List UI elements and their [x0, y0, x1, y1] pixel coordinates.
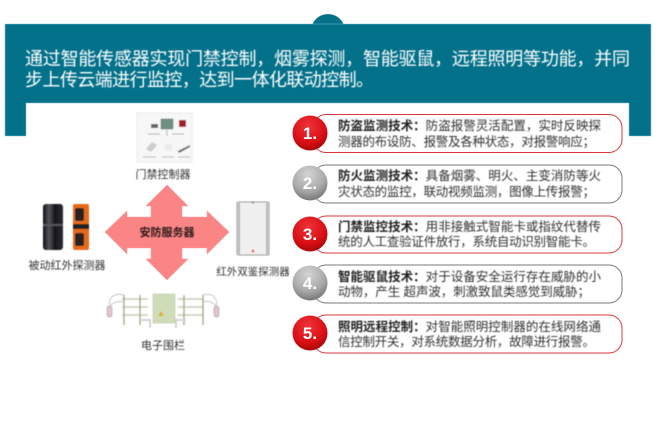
- item 5 text: [338, 319, 601, 349]
- label: electronic fence: 电子围栏: [141, 338, 185, 352]
- banner text: 步上传云端进行监控，达到一体化联动控制。: [25, 70, 374, 90]
- item 4 text: 智能驱鼠技术：对于设备安全运行存在威胁的小: [338, 269, 601, 284]
- badge 1: [292, 116, 328, 150]
- badge 1: 1.: [303, 124, 317, 143]
- item 4: [292, 265, 622, 303]
- badge 5: 5.: [303, 324, 317, 343]
- device: access controller: [137, 113, 192, 162]
- banner text: [25, 49, 630, 90]
- arrow label: 安防服务器: [140, 225, 194, 239]
- badge 2: 2.: [303, 174, 317, 193]
- item 2 text: 防火监测技术：具备烟雾、明火、主变消防等火: [338, 168, 601, 183]
- item 4 text: 动物，产生 超声波，刺激致鼠类感觉到威胁；: [338, 284, 590, 299]
- item 4 text: [338, 269, 601, 299]
- item 2: [292, 165, 622, 203]
- item 3 text: [338, 219, 601, 249]
- label: dual infrared detector: 红外双鉴探测器: [216, 265, 290, 278]
- device: passive infrared detector: [43, 204, 89, 250]
- item 1 text: 防盗监测技术：防盗报警灵活配置，实时反映探: [338, 118, 601, 133]
- item 2 text: [338, 168, 601, 199]
- four-way arrow: [105, 185, 229, 280]
- badge 3: 3.: [303, 225, 317, 244]
- label: access controller: 门禁控制器: [136, 167, 190, 181]
- item 3: [292, 216, 622, 253]
- item 5: [292, 315, 622, 353]
- banner text: 通过智能传感器实现门禁控制，烟雾探测，智能驱鼠，远程照明等功能，并同: [25, 49, 630, 69]
- item 1 text: [338, 118, 601, 149]
- label: passive infrared detector: 被动红外探测器: [28, 259, 106, 272]
- item 1 text: 测器的布设防、报警及各种状态，对报警响应；: [338, 134, 595, 149]
- item 2 text: 灾状态的监控，联动视频监测，图像上传报警；: [338, 184, 595, 199]
- item 5 text: 照明远程控制：对智能照明控制器的在线网络通: [338, 319, 601, 334]
- device: electronic fence: [107, 294, 219, 328]
- badge 4: 4.: [303, 274, 317, 293]
- item 3 text: 统的人工查验证件放行，系统自动识别智能卡。: [338, 234, 595, 249]
- badge 2: [292, 166, 328, 200]
- header banner: [5, 14, 651, 136]
- badge 5: [292, 316, 328, 350]
- badge 4: [292, 266, 328, 300]
- badge 3: [292, 216, 328, 252]
- item 1: [292, 114, 622, 152]
- device: dual infrared detector: [237, 202, 269, 255]
- item 5 text: 信控制开关，对系统数据分析，故障进行报警。: [338, 334, 595, 349]
- item 3 text: 门禁监控技术：用非接触式智能卡或指纹代替传: [338, 219, 601, 234]
